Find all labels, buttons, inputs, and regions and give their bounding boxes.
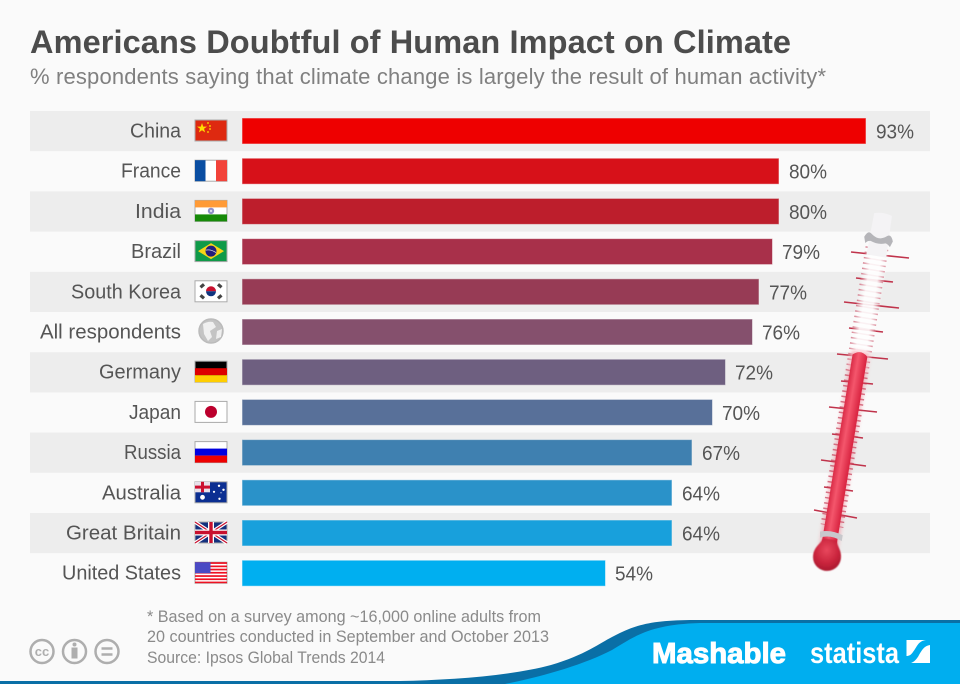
footnote: 20 countries conducted in September and October 2013 [147,627,549,646]
icon: globe [199,319,223,343]
row: Germany: 72% [735,363,773,385]
subtitle: % respondents saying that climate change is largely the result of human activity* [30,64,826,89]
flag: Brazil [195,241,227,262]
row: Germany [30,352,930,392]
thermometer red column [821,351,868,548]
flag: India [195,200,227,221]
logo: statista: statista [810,637,899,670]
icon: creative commons licence: cc [35,644,49,659]
panel: bar chart [30,111,930,586]
row: China: China [130,120,182,142]
row: Brazil: 79% [782,242,820,264]
flag: Germany [195,361,227,382]
thermometer bulb [811,537,844,573]
flag: Russia [195,442,227,463]
flag: Great Britain [195,522,227,543]
row: South Korea: 77% [769,282,807,304]
row: Japan: 70% [722,403,760,425]
row: Brazil: Brazil [131,241,181,263]
thermometer glass tube [846,241,890,373]
row: Australia: Australia [102,482,182,504]
row: Australia: 64% [682,483,720,505]
row: India: 80% [789,202,827,224]
flag: United States [195,562,227,583]
row: Japan: Japan [129,402,181,424]
row: South Korea: South Korea [71,281,182,303]
row: France [121,159,827,184]
row: All respondents: 76% [762,322,800,344]
row: Great Britain [30,513,930,553]
flag: South Korea [195,281,227,302]
row: Germany: Germany [99,362,181,384]
flag: China [195,120,227,141]
row: United States [62,561,653,586]
thermometer cap [866,211,893,258]
flag: Japan [195,401,227,422]
row: France: 80% [789,162,827,184]
footnote [147,607,549,667]
thermometer scale: minor ticks [832,248,877,526]
flag: France [195,160,227,181]
footnote: * Based on a survey among ~16,000 online adults from [147,607,541,626]
thermometer scale: major ticks [814,252,909,518]
icon: creative commons licence [30,640,118,663]
row: South Korea [30,272,930,312]
row: United States: United States [62,563,181,585]
title: Americans Doubtful of Human Impact on Climate [30,24,791,60]
logo: Mashable: Mashable [652,638,786,670]
footnote: Source: Ipsos Global Trends 2014 [147,648,385,667]
row: China: 93% [876,122,914,144]
row: Australia [102,480,720,505]
row: All respondents [40,319,800,344]
row: Great Britain: 64% [682,524,720,546]
icon: statista mark [906,640,930,663]
row: France: France [121,161,181,183]
thermometer glow [819,350,869,551]
thermometer clip [863,232,894,247]
thermometer lower clip [819,530,843,541]
row: India [30,191,930,232]
row: United States: 54% [615,564,653,586]
thermometer [810,211,909,573]
footer wave [0,620,960,684]
row: Russia: Russia [124,442,182,464]
row: Brazil [131,239,820,264]
row: Russia: 67% [702,443,740,465]
row: Japan [129,400,760,425]
row: All respondents: All respondents [40,322,181,344]
row: India: India [135,201,182,223]
flag: Australia [195,482,227,503]
row: China [30,111,930,151]
row: Great Britain: Great Britain [66,522,181,544]
row: Russia [30,433,930,473]
